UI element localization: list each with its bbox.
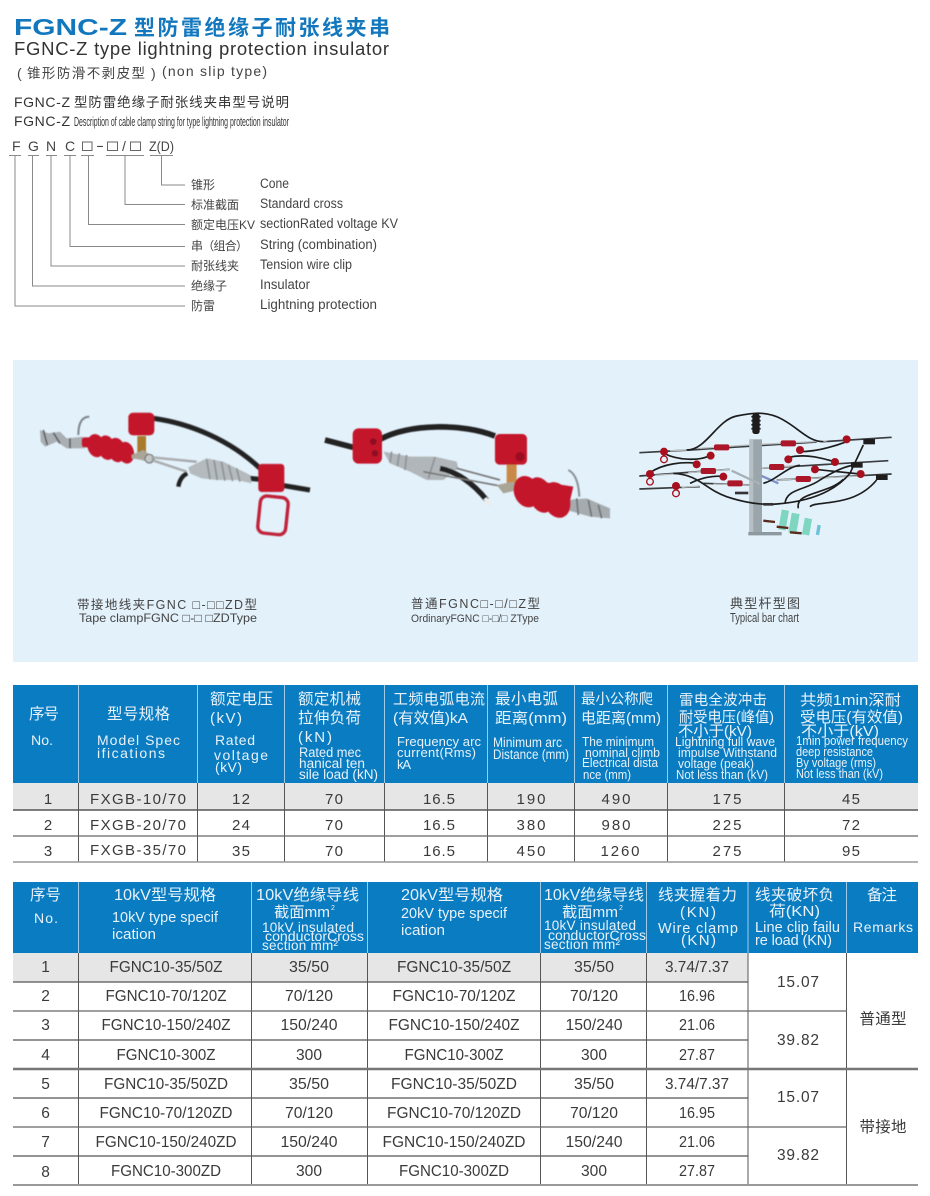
column: minimum arc distance: Distance (mm) xyxy=(493,747,569,762)
column: wire clamp force: 线夹握着力 xyxy=(658,886,737,904)
column: rated voltage: (kV) xyxy=(210,710,242,727)
row 7: FGNC10-150/240ZD xyxy=(382,1134,526,1151)
column: 10kV cross section: conductorCross xyxy=(265,929,364,944)
product: ordinary clamp xyxy=(325,427,610,522)
column: minimum arc distance: 最小电弧 xyxy=(495,690,558,708)
table: FGNC specifications xyxy=(13,882,918,1185)
column: second cross section: 2 xyxy=(619,905,623,912)
chinese labels: 绝缘子 xyxy=(191,278,227,293)
column: rated voltage xyxy=(210,690,273,775)
row 2: 24 xyxy=(232,817,250,834)
row 5: 3.74/7.37 xyxy=(665,1076,729,1093)
column: power frequency withstand xyxy=(796,692,908,781)
row 1: 45 xyxy=(842,791,860,808)
column: 10kV type: ication xyxy=(112,926,156,943)
column: mechanical load: 拉伸负荷 xyxy=(298,709,361,727)
column: failure load: Line clip failu xyxy=(755,920,840,936)
title: chinese: 型防雷绝缘子耐张线夹串 xyxy=(134,16,390,40)
column: number: No. xyxy=(31,732,53,748)
row 5: FGNC10-35/50ZD xyxy=(391,1076,517,1093)
row 5: 5 xyxy=(41,1076,50,1093)
model description heading: 型防雷绝缘子耐张线夹串型号说明 xyxy=(74,95,289,110)
product: grounded clamp xyxy=(40,413,310,535)
column: frequency arc current: Frequency arc xyxy=(397,734,482,749)
model code letters: - xyxy=(96,137,105,153)
column: second cross section: conductorCross xyxy=(548,928,646,943)
column: lightning impulse: impulse Withstand xyxy=(678,745,777,760)
table 2 background xyxy=(13,882,918,1185)
column: 10kV cross section: 截面mm xyxy=(274,904,330,921)
row 1: 12 xyxy=(232,791,250,808)
row 1: FGNC10-35/50Z xyxy=(110,959,222,976)
column: second cross section xyxy=(544,886,646,952)
english labels: Cone xyxy=(260,176,289,191)
caption: pole diagram xyxy=(730,596,800,625)
column: power frequency withstand: By voltage (rms) xyxy=(796,755,876,770)
english labels xyxy=(260,176,398,312)
row 2: 16.5 xyxy=(423,817,455,834)
column: frequency arc current: 工频电弧电流 xyxy=(393,691,485,708)
row 5: 35/50 xyxy=(574,1076,614,1093)
row 2: 2 xyxy=(44,817,52,834)
row 8: 300 xyxy=(296,1163,322,1180)
table 2 header text xyxy=(30,886,913,953)
column: 10kV cross section xyxy=(256,886,364,953)
column: number xyxy=(30,886,61,926)
caption: pole diagram: 典型杆型图 xyxy=(730,596,800,611)
column: rated voltage: (kV) xyxy=(215,759,242,775)
row 4: 4 xyxy=(41,1047,50,1064)
row 8: 8 xyxy=(41,1164,50,1181)
column: second cross section: 截面mm xyxy=(562,904,618,921)
row 4: 27.87 xyxy=(679,1047,715,1064)
chinese labels: 防雷 xyxy=(191,298,215,313)
caption: grounded clamp: 带接地线夹FGNC □-□□ZD型 xyxy=(77,597,257,612)
model code letters: C xyxy=(65,138,75,154)
column: model xyxy=(97,705,180,761)
row 3: 16.5 xyxy=(423,843,455,860)
column: minimum arc distance: Minimum arc xyxy=(493,735,562,750)
row 4 xyxy=(41,1047,715,1064)
row 3: FGNC10-150/240Z xyxy=(102,1017,230,1034)
column: failure load: re load (KN) xyxy=(755,933,832,949)
row 2 xyxy=(41,988,715,1005)
column: mechanical load xyxy=(298,690,378,782)
row 4: 300 xyxy=(296,1047,322,1064)
column: creepage distance: Electrical dista xyxy=(582,755,659,770)
chinese labels xyxy=(191,178,255,313)
caption: ordinary clamp: OrdinaryFGNC □-□/□ ZType xyxy=(411,613,539,625)
column: creepage distance: 电距离(mm) xyxy=(581,710,661,727)
row 2: 72 xyxy=(842,817,860,834)
subtitle: non slip type: ( xyxy=(17,65,22,81)
column: 20kV type: 20kV型号规格 xyxy=(401,886,504,904)
column: power frequency withstand: 1min power frequency xyxy=(796,733,908,748)
column: failure load xyxy=(755,886,840,949)
title block xyxy=(14,14,390,81)
row 7: 7 xyxy=(41,1134,50,1151)
row 7: 21.06 xyxy=(679,1134,715,1151)
row 2: 70/120 xyxy=(570,988,618,1005)
chinese labels: 额定电压KV xyxy=(191,217,255,232)
row 7: FGNC10-150/240ZD xyxy=(96,1134,236,1151)
column: 10kV cross section: 10kV绝缘导线 xyxy=(256,886,359,904)
table: FXGB specifications xyxy=(13,685,918,862)
model code letters: F xyxy=(12,138,21,154)
column: wire clamp force: (KN) xyxy=(681,932,716,949)
title: chinese: FGNC-Z xyxy=(14,14,127,40)
column: wire clamp force xyxy=(658,886,738,949)
column: creepage distance: nce (mm) xyxy=(583,767,631,782)
row 3 xyxy=(41,1017,715,1034)
leader lines xyxy=(9,156,185,306)
row 1: 35/50 xyxy=(574,959,614,976)
column: power frequency withstand: 不小于(kV) xyxy=(801,723,879,740)
model code diagram xyxy=(9,137,398,313)
column: frequency arc current xyxy=(393,691,485,772)
column: number: 序号 xyxy=(30,886,61,904)
column: second cross section: section mm² xyxy=(544,937,620,952)
model code letters: G xyxy=(28,138,39,154)
column: lightning impulse: 雷电全波冲击 xyxy=(679,691,767,709)
column: frequency arc current: (有效值)kA xyxy=(393,710,468,727)
row 3: 95 xyxy=(842,843,860,860)
column: mechanical load: sile load (kN) xyxy=(299,767,378,782)
chinese labels: 耐张线夹 xyxy=(191,259,239,273)
merged failure load values xyxy=(777,974,819,1164)
chinese labels: 标准截面 xyxy=(191,198,239,212)
table 1 background xyxy=(13,685,918,862)
model code letters xyxy=(12,137,174,154)
column: lightning impulse: Lightning full wave xyxy=(675,734,775,749)
column: power frequency withstand: deep resistance xyxy=(796,744,873,759)
row 5: 35/50 xyxy=(289,1076,329,1093)
table 2 data rows xyxy=(41,959,906,1181)
row 6 xyxy=(41,1105,715,1122)
row 1: FXGB-10/70 xyxy=(90,791,186,808)
column: number xyxy=(29,705,59,748)
model description heading: FGNC-Z xyxy=(14,113,70,129)
row 2: 70 xyxy=(325,817,343,834)
column: 10kV cross section: section mm² xyxy=(262,938,338,953)
row 2: FXGB-20/70 xyxy=(90,817,186,834)
title: chinese xyxy=(14,14,390,40)
row 2: 980 xyxy=(602,817,630,834)
model code letters: N xyxy=(46,138,56,154)
column: creepage distance: The minimum xyxy=(582,734,654,749)
column: remarks: Remarks xyxy=(853,919,913,935)
model description heading: Description of cable clamp string for type lightning protection insulator xyxy=(74,114,289,129)
subtitle: non slip type: 锥形防滑不剥皮型 xyxy=(27,66,145,81)
row 4: FGNC10-300Z xyxy=(116,1047,216,1064)
row 8: 300 xyxy=(581,1163,607,1180)
row 8 xyxy=(41,1163,715,1181)
row 3: FXGB-35/70 xyxy=(90,842,186,859)
row 3: 35 xyxy=(232,843,250,860)
subtitle: non slip type: (non slip type) xyxy=(162,63,267,79)
column: lightning impulse: 耐受电压(峰值) xyxy=(679,709,774,726)
model code letters: Z(D) xyxy=(149,138,174,154)
row 1: 3.74/7.37 xyxy=(665,959,729,976)
row 4: FGNC10-300Z xyxy=(404,1047,504,1064)
column: power frequency withstand: 受电压(有效值) xyxy=(800,709,903,726)
merged failure load values: 15.07 xyxy=(777,974,819,991)
english labels: Lightning protection xyxy=(260,297,377,312)
column: lightning impulse: voltage (peak) xyxy=(678,756,754,771)
column: lightning impulse: Not less than (kV) xyxy=(676,767,768,782)
row 3: 150/240 xyxy=(280,1017,338,1034)
column: failure load: 荷(KN) xyxy=(769,903,820,920)
caption: grounded clamp xyxy=(77,597,257,625)
column: creepage distance xyxy=(581,691,661,782)
row 5 xyxy=(41,1076,729,1093)
merged remarks values xyxy=(860,1010,906,1136)
row 1 xyxy=(44,791,860,808)
column: frequency arc current: current(Rms) xyxy=(397,745,476,760)
row 2: 225 xyxy=(712,817,742,834)
column: 10kV type: 10kV型号规格 xyxy=(114,886,217,904)
row 1: 175 xyxy=(712,791,742,808)
row 2: 2 xyxy=(41,988,50,1005)
column: failure load: 线夹破坏负 xyxy=(755,886,834,904)
column: power frequency withstand: Not less than (kV) xyxy=(796,766,883,781)
chinese labels: 锥形 xyxy=(191,178,215,192)
column: 10kV cross section: 10kV insulated xyxy=(262,920,354,935)
column: rated voltage: voltage xyxy=(214,747,268,763)
row 2 xyxy=(44,817,860,834)
merged failure load values: 39.82 xyxy=(777,1147,819,1164)
english labels: String (combination) xyxy=(260,237,377,252)
subtitle: english: FGNC-Z type lightning protection insulator xyxy=(14,38,389,59)
row 5: FGNC10-35/50ZD xyxy=(104,1076,228,1093)
column: number: 序号 xyxy=(29,705,59,723)
column: rated voltage: Rated xyxy=(215,732,255,748)
row 3: 21.06 xyxy=(679,1017,715,1034)
row 1: 490 xyxy=(602,791,630,808)
column: wire clamp force: (KN) xyxy=(680,904,716,921)
column: second cross section: 10kV绝缘导线 xyxy=(544,886,644,904)
caption: ordinary clamp xyxy=(411,597,540,625)
column: 10kV type: 10kV type specif xyxy=(112,909,219,926)
row 2: 380 xyxy=(516,817,546,834)
table 1 data rows xyxy=(44,791,860,860)
row 3: 3 xyxy=(41,1017,50,1034)
caption: ordinary clamp: 普通FGNC□-□/□Z型 xyxy=(411,597,540,611)
table 1 header text xyxy=(29,690,908,782)
row 1: 1 xyxy=(44,791,52,808)
column: mechanical load: hanical ten xyxy=(299,756,365,771)
english labels: Tension wire clip xyxy=(260,257,352,272)
column: 20kV type: ication xyxy=(401,922,445,939)
caption: grounded clamp: Tape clampFGNC □-□ □ZDType xyxy=(79,611,257,625)
row 3: 275 xyxy=(712,843,742,860)
column: creepage distance: nominal climb xyxy=(585,745,660,760)
column: 10kV type xyxy=(112,886,219,943)
column: remarks xyxy=(853,886,913,935)
row 3: 3 xyxy=(44,843,52,860)
row 4: 300 xyxy=(581,1047,607,1064)
merged failure load values: 39.82 xyxy=(777,1032,819,1049)
row 3: FGNC10-150/240Z xyxy=(388,1017,520,1034)
column: rated voltage: 额定电压 xyxy=(210,690,273,708)
row 3: 450 xyxy=(516,843,546,860)
column: mechanical load: Rated mec xyxy=(299,745,361,760)
row 6: 70/120 xyxy=(285,1105,333,1122)
row 2: 16.96 xyxy=(679,988,715,1005)
row 1: 16.5 xyxy=(423,791,455,808)
column: mechanical load: (kN) xyxy=(298,729,332,746)
row 6: 16.95 xyxy=(679,1105,715,1122)
row 1: 70 xyxy=(325,791,343,808)
column: lightning impulse: 不小于(kV) xyxy=(678,723,752,740)
row 6: 6 xyxy=(41,1105,50,1122)
row 7: 150/240 xyxy=(566,1134,623,1151)
row 6: FGNC10-70/120ZD xyxy=(100,1105,232,1122)
merged failure load values: 15.07 xyxy=(777,1089,819,1106)
english labels: Standard cross xyxy=(260,196,343,211)
row 2: FGNC10-70/120Z xyxy=(106,988,226,1005)
english labels: Insulator xyxy=(260,277,310,292)
subtitle: non slip type xyxy=(17,63,267,81)
column: lightning impulse xyxy=(675,691,777,782)
english labels: sectionRated voltage KV xyxy=(260,216,398,231)
row 1: 35/50 xyxy=(289,959,329,976)
row 1: FGNC10-35/50Z xyxy=(397,959,511,976)
column: power frequency withstand: 共频1min深耐 xyxy=(800,692,901,709)
row 8: 27.87 xyxy=(679,1163,715,1180)
row 3: 1260 xyxy=(600,843,640,860)
row 3: 150/240 xyxy=(566,1017,623,1034)
column: model: 型号规格 xyxy=(107,705,170,723)
panel: product images xyxy=(13,360,918,662)
column: model: Model Spec xyxy=(97,732,180,748)
row 7: 150/240 xyxy=(280,1134,338,1151)
model description heading: FGNC-Z xyxy=(14,94,70,110)
column: model: ifications xyxy=(97,745,165,761)
column: mechanical load: 额定机械 xyxy=(298,690,361,708)
product: typical pole diagram xyxy=(639,413,892,535)
column: minimum arc distance xyxy=(493,690,569,762)
caption: pole diagram: Typical bar chart xyxy=(730,610,799,625)
row 3 xyxy=(44,842,860,860)
column: second cross section: 10kV insulated xyxy=(544,918,636,933)
row 1: 1 xyxy=(41,959,50,976)
column: 10kV cross section: 2 xyxy=(331,905,335,912)
column: frequency arc current: kA xyxy=(397,757,411,772)
column: 20kV type xyxy=(401,886,508,939)
row 1: 190 xyxy=(516,791,546,808)
merged remarks values: 普通型 xyxy=(860,1010,906,1028)
row 8: FGNC10-300ZD xyxy=(111,1163,221,1180)
column: creepage distance: 最小公称爬 xyxy=(581,691,654,708)
model description heading xyxy=(14,94,289,129)
model code letters: / xyxy=(122,138,126,154)
row 7 xyxy=(41,1134,715,1151)
column: number: No. xyxy=(34,910,58,926)
row 2: FGNC10-70/120Z xyxy=(392,988,516,1005)
column: 20kV type: 20kV type specif xyxy=(401,905,508,922)
chinese labels: 串（组合） xyxy=(191,238,248,253)
column: remarks: 备注 xyxy=(867,886,897,904)
row 8: FGNC10-300ZD xyxy=(399,1163,509,1180)
row 1 xyxy=(41,959,729,976)
column: wire clamp force: Wire clamp xyxy=(658,921,738,937)
row 3: 70 xyxy=(325,843,343,860)
row 2: 70/120 xyxy=(285,988,333,1005)
merged remarks values: 带接地 xyxy=(860,1118,906,1136)
row 6: FGNC10-70/120ZD xyxy=(387,1105,521,1122)
row 6: 70/120 xyxy=(570,1105,618,1122)
column: minimum arc distance: 距离(mm) xyxy=(495,710,567,727)
subtitle: non slip type: ) xyxy=(151,65,156,81)
